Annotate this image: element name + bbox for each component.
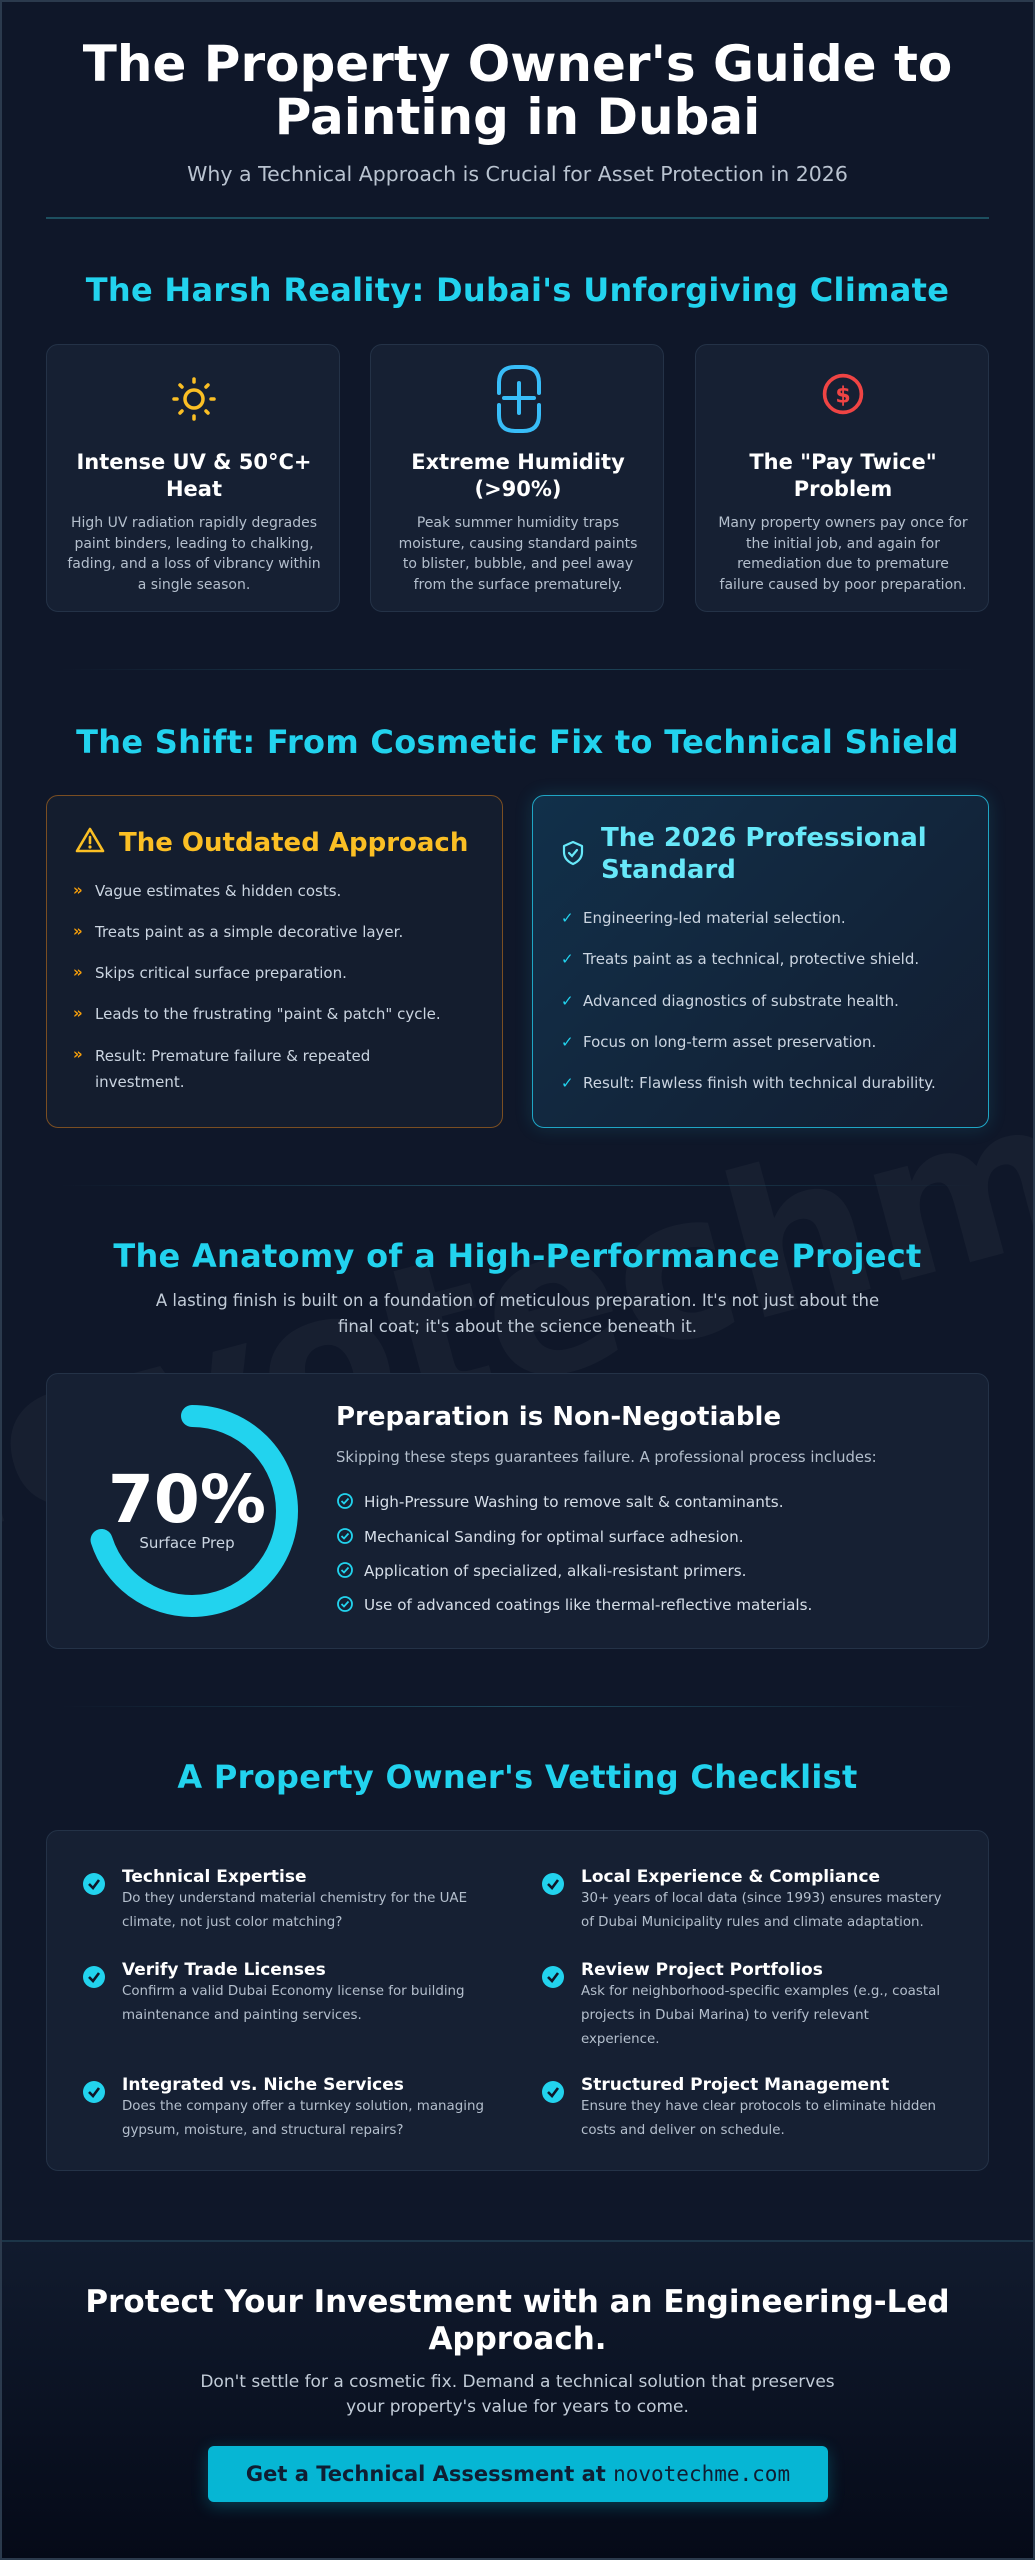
item: project management: Ensure they have clear protocols to eliminate hidden costs and deliver on schedule. [581, 2099, 936, 2138]
item: technical expertise: Do they understand material chemistry for the UAE climate, not just color matching? [122, 1891, 467, 1930]
list: ✓ [561, 950, 574, 968]
panel: humidity: Extreme Humidity [411, 450, 625, 474]
title [83, 35, 952, 146]
panel: humidity: Peak summer humidity traps moisture, causing standard paints to blister, bubble, and peel away from the surface prematurely. [399, 515, 637, 592]
panel: pay twice: The "Pay Twice" [749, 450, 937, 474]
chart: donut 70%: 70% [108, 1461, 266, 1538]
text: anatomy intro: A lasting finish is built on a foundation of meticulous preparation. It's not just about the final coat; it's about the science beneath it. [156, 1291, 879, 1336]
footer: call to action [0, 2240, 1035, 2560]
heading: Protect Your Investment with an Engineering-Led Approach. [85, 2284, 950, 2357]
list: Skips critical surface preparation. [95, 964, 347, 982]
icon: sun [172, 377, 216, 421]
subtitle: Why a Technical Approach is Crucial for Asset Protection in 2026 [187, 162, 848, 186]
text: Heat [166, 477, 222, 501]
panel: checklist [46, 1830, 989, 2171]
item: technical expertise [83, 1867, 467, 1930]
item: portfolios: Review Project Portfolios [581, 1960, 823, 1980]
list: Result: Flawless finish with technical durability. [583, 1074, 936, 1092]
list [561, 909, 936, 1092]
list [73, 881, 441, 1091]
chart: donut 70%: Surface Prep [139, 1534, 235, 1552]
panel: UV heat [46, 344, 340, 612]
title: The Property Owner's Guide to [83, 35, 952, 93]
list: Advanced diagnostics of substrate health. [583, 992, 899, 1010]
item: local experience: 30+ years of local data (since 1993) ensures mastery of Dubai Municipality rules and climate adaptation. [581, 1891, 942, 1930]
text: Skipping these steps guarantees failure. A professional process includes: [336, 1449, 877, 1466]
panel: professional standard [532, 795, 989, 1128]
item: integrated services [83, 2075, 484, 2138]
heading: shift: The Shift: From Cosmetic Fix to Technical Shield [76, 723, 959, 761]
list: Application of specialized, alkali-resistant primers. [364, 1562, 746, 1580]
item: local experience [542, 1867, 942, 1930]
list [337, 1493, 812, 1614]
text: High UV radiation rapidly degrades paint binders, leading to chalking, fading, and a loss of vibrancy within a single season. [67, 515, 321, 592]
heading: anatomy: The Anatomy of a High-Performance Project [113, 1237, 922, 1275]
item: integrated services: Does the company offer a turnkey solution, managing gypsum, moisture, and structural repairs? [122, 2099, 484, 2138]
item: technical expertise: Technical Expertise [122, 1867, 307, 1887]
list: Vague estimates & hidden costs. [95, 882, 341, 900]
chart: donut 70% [90, 1405, 298, 1617]
button [208, 2446, 828, 2502]
item: project management: Structured Project Management [581, 2075, 889, 2095]
list: Mechanical Sanding for optimal surface adhesion. [364, 1528, 744, 1546]
item: trade licenses [83, 1960, 465, 2023]
icon: dollar coin [822, 374, 864, 414]
text: Intense UV & 50°C+ [76, 450, 312, 474]
list: » [73, 881, 83, 899]
list: ✓ [561, 1033, 574, 1051]
item: project management [542, 2075, 936, 2138]
panel: pay twice [695, 344, 989, 612]
icon: dollar coin: $ [835, 383, 851, 408]
text: Don't settle for a cosmetic fix. Demand a technical solution that preserves your property's value for years to come. [200, 2372, 835, 2417]
list: Result: Premature failure & repeated investment. [95, 1047, 370, 1091]
text [67, 450, 321, 592]
list: » [73, 922, 83, 940]
button: Get a Technical Assessment at novotechme.com [246, 2462, 790, 2486]
heading: The 2026 Professional [601, 823, 927, 853]
item: portfolios [542, 1960, 940, 2047]
heading [601, 823, 927, 885]
icon: humidity [497, 365, 541, 433]
panel: outdated approach [46, 795, 503, 1128]
title: Painting in Dubai [275, 88, 760, 146]
list: » [73, 1045, 83, 1063]
panel: pay twice: Many property owners pay once for the initial job, and again for remediation due to premature failure caused by poor preparation. [718, 515, 968, 592]
heading: harsh reality: The Harsh Reality: Dubai's Unforgiving Climate [86, 271, 949, 309]
item: trade licenses: Verify Trade Licenses [122, 1960, 326, 1980]
list: ✓ [561, 992, 574, 1010]
list: Leads to the frustrating "paint & patch" cycle. [95, 1005, 441, 1023]
panel: preparation [46, 1373, 989, 1649]
list: Engineering-led material selection. [583, 909, 846, 927]
list: High-Pressure Washing to remove salt & contaminants. [364, 1493, 784, 1511]
heading: The Outdated Approach [119, 828, 468, 858]
list: » [73, 1004, 83, 1022]
list: Focus on long-term asset preservation. [583, 1033, 876, 1051]
heading: Preparation is Non-Negotiable [336, 1402, 781, 1432]
item: integrated services: Integrated vs. Niche Services [122, 2075, 404, 2095]
list: Treats paint as a technical, protective shield. [583, 950, 919, 968]
list: » [73, 963, 83, 981]
item: local experience: Local Experience & Compliance [581, 1867, 880, 1887]
item: trade licenses: Confirm a valid Dubai Economy license for building maintenance and painting services. [122, 1984, 465, 2023]
list: ✓ [561, 909, 574, 927]
list: ✓ [561, 1074, 574, 1092]
item: portfolios: Ask for neighborhood-specific examples (e.g., coastal projects in Dubai Marina) to verify relevant experience. [581, 1984, 940, 2047]
list: Treats paint as a simple decorative layer. [95, 923, 403, 941]
panel: pay twice: Problem [794, 477, 892, 501]
icon: shield [562, 840, 584, 866]
panel: humidity: (>90%) [474, 477, 562, 501]
heading: Standard [601, 855, 736, 885]
panel: humidity [370, 344, 664, 612]
list: Use of advanced coatings like thermal-reflective materials. [364, 1596, 812, 1614]
heading: checklist: A Property Owner's Vetting Checklist [177, 1758, 858, 1796]
